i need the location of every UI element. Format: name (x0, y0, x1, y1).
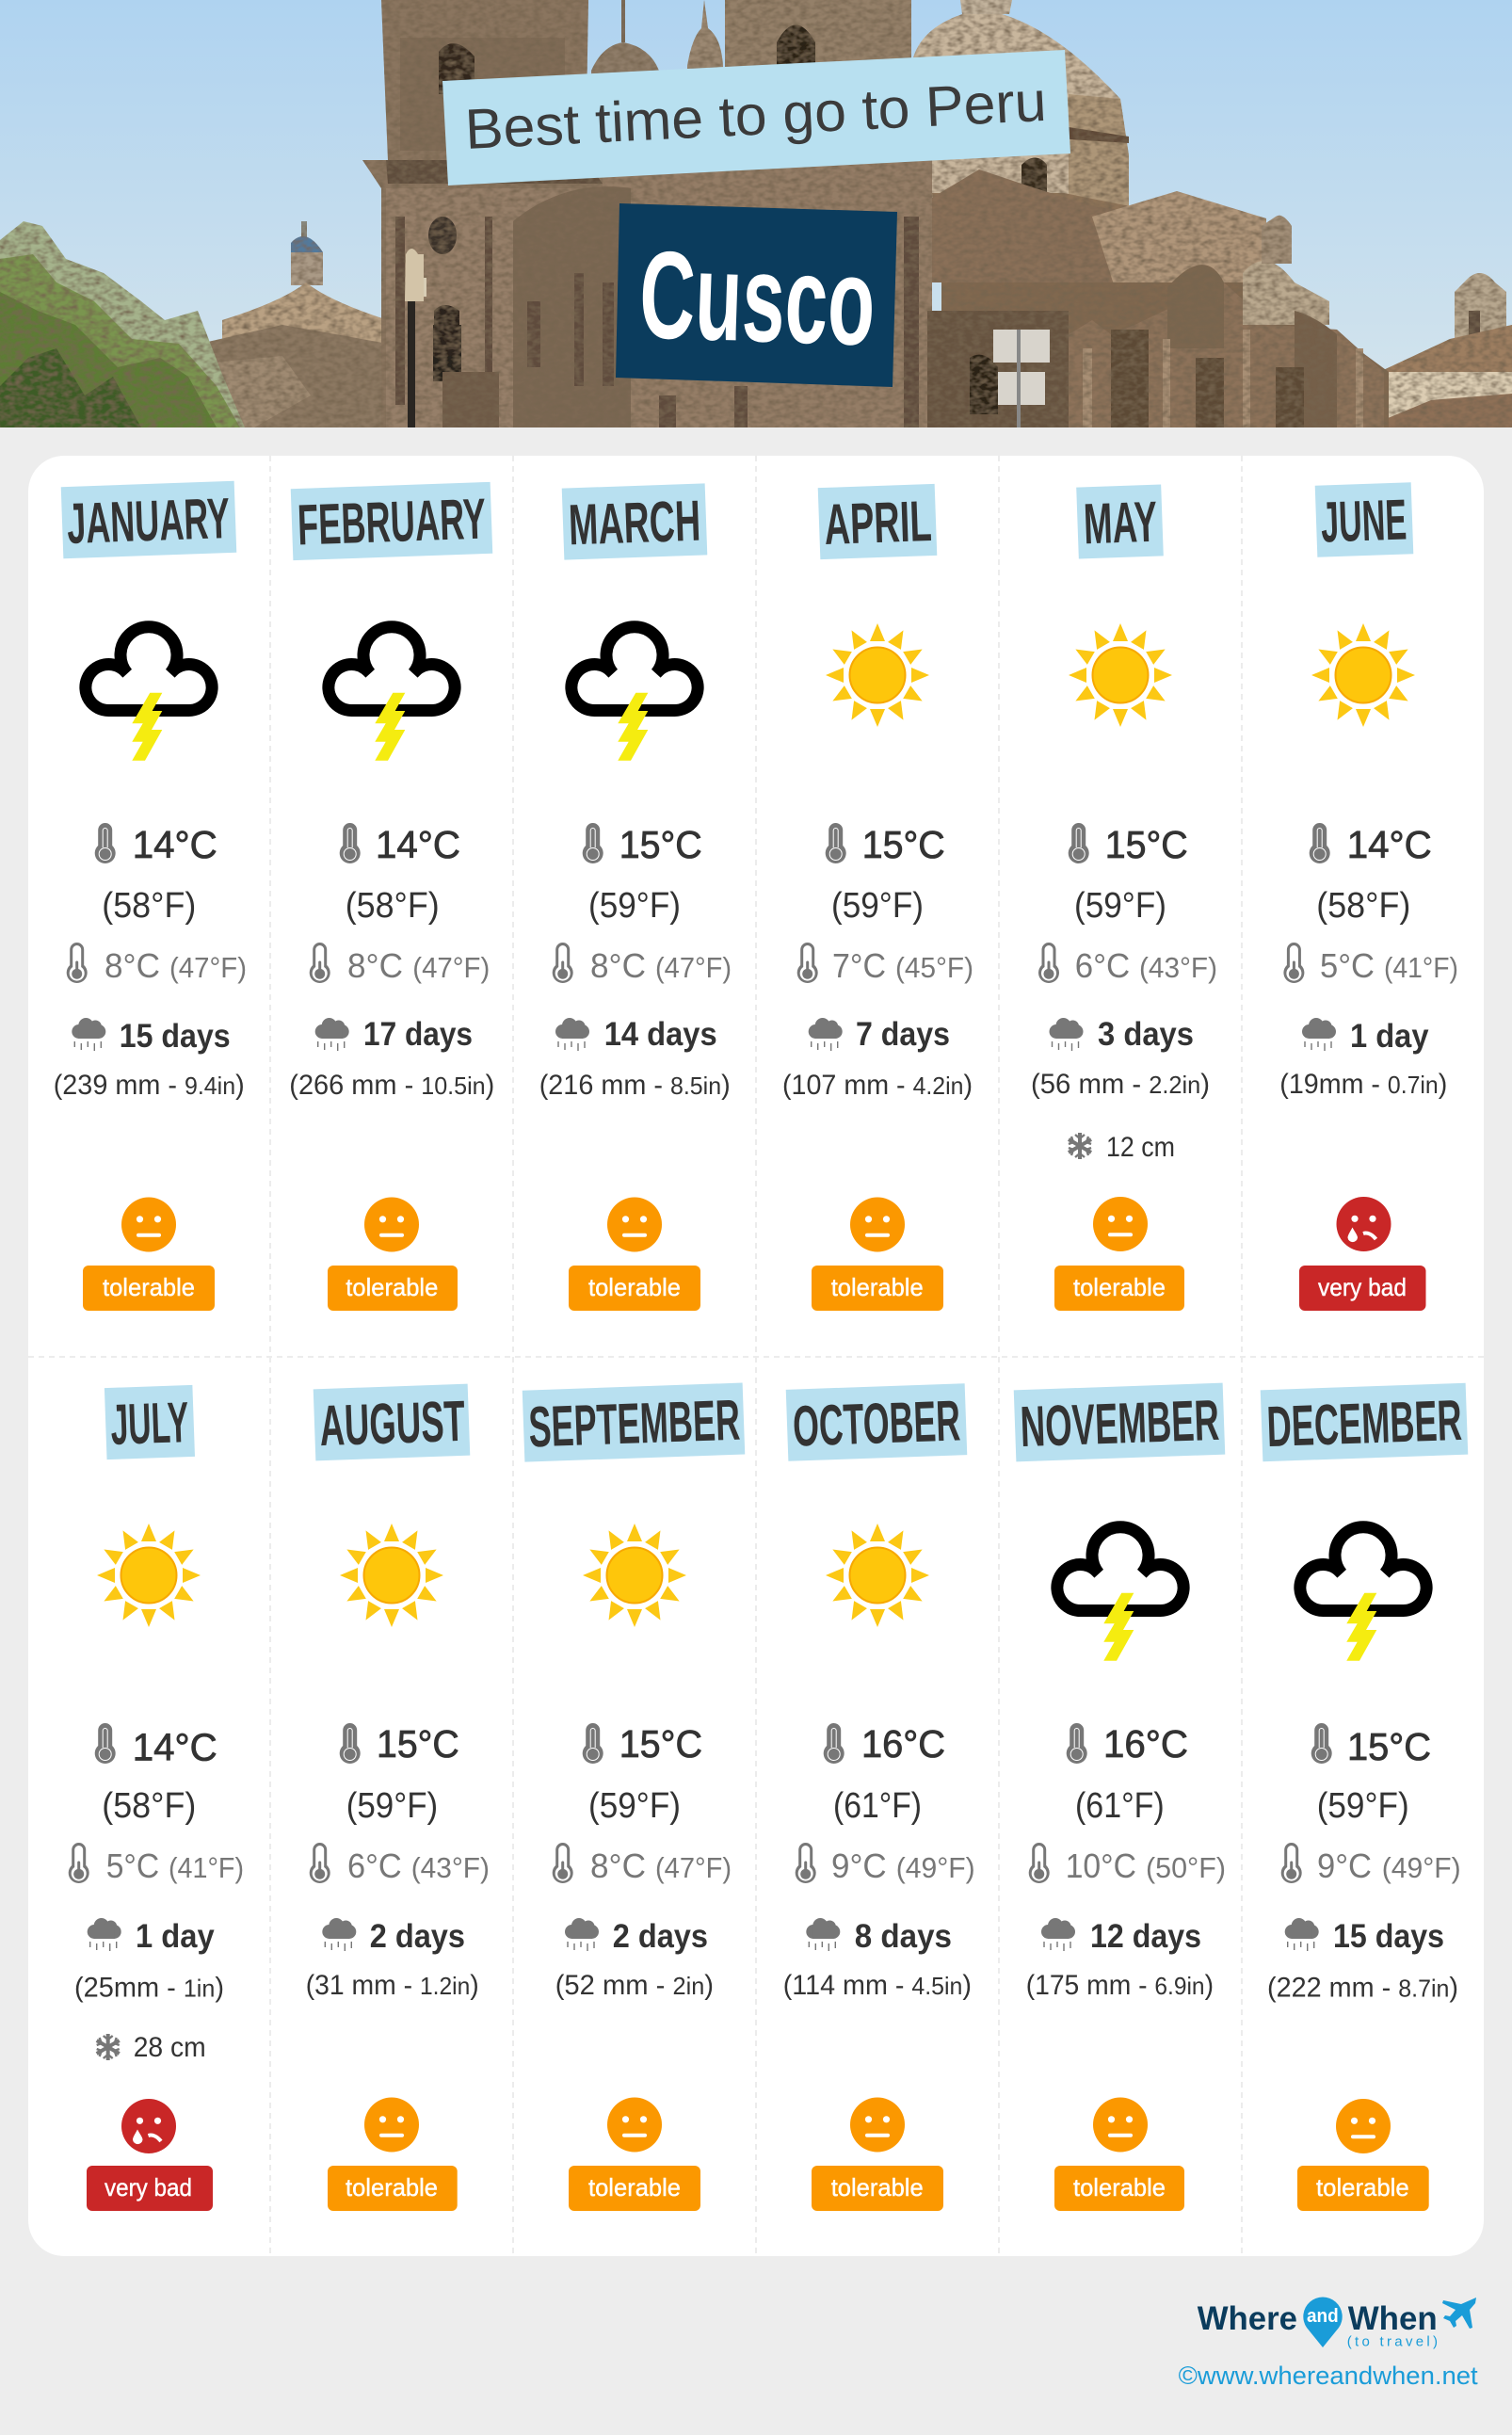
logo: Where and When (to travel): When (1348, 2300, 1438, 2337)
panel: February (289, 482, 494, 1311)
rainy days: 15 days (120, 1018, 231, 1055)
icon: max thermometer (1311, 1723, 1332, 1764)
icon: min thermometer (797, 943, 818, 983)
rainy days: 8 days (855, 1918, 952, 1955)
rainfall amount: (19mm - 0.7in) (1279, 1069, 1447, 1100)
month heading: September (523, 1383, 745, 1462)
panel: September (523, 1383, 745, 2211)
rating: tolerable: tolerable (1073, 2173, 1166, 2201)
icon: max thermometer (95, 823, 116, 863)
min temperature (106, 1846, 244, 1885)
max temperature celsius: 14°C (133, 823, 217, 866)
month heading: June (1315, 482, 1413, 557)
min temperature: 10°C (1066, 1846, 1136, 1885)
min temperature: 8°C (105, 946, 160, 985)
month heading: January: JANUARY (66, 486, 231, 556)
min temperature: 6°C (1075, 946, 1130, 985)
max temperature fahrenheit: (59°F) (1317, 1786, 1409, 1826)
header photo: Cusco cathedral (0, 0, 1512, 427)
min temperature: (47°F) (412, 951, 490, 984)
icon: neutral face (850, 1198, 905, 1252)
min temperature: 9°C (1317, 1846, 1372, 1885)
month heading: October: OCTOBER (792, 1388, 961, 1459)
rainfall amount: (31 mm - 1.2in) (306, 1970, 479, 2001)
rating: tolerable: tolerable (346, 1273, 438, 1301)
rainfall amount: (266 mm - 10.5in) (289, 1070, 494, 1101)
icon: min thermometer (1038, 943, 1059, 983)
logo: Where and When (to travel): (to travel) (1347, 2334, 1438, 2350)
min temperature: 8°C (590, 1846, 646, 1885)
city title banner (616, 203, 897, 387)
icon: min thermometer (310, 943, 330, 983)
icon: rain (315, 1018, 349, 1051)
panel: December (1261, 1383, 1468, 2211)
icon: max thermometer (583, 1723, 603, 1764)
icon: storm (1300, 1527, 1426, 1661)
max temperature celsius: 15°C (619, 823, 702, 866)
min temperature: (47°F) (655, 951, 732, 984)
icon: storm (329, 627, 455, 761)
icon: sun (826, 1524, 929, 1627)
icon: min thermometer (67, 943, 88, 983)
month heading: May: MAY (1083, 490, 1158, 556)
rating: very bad (87, 2166, 213, 2211)
icon: neutral face (1336, 2099, 1391, 2153)
month heading: September: SEPTEMBER (527, 1388, 741, 1459)
max temperature celsius: 16°C (1103, 1722, 1188, 1766)
month heading: July: JULY (109, 1390, 190, 1457)
min temperature (1075, 946, 1217, 985)
icon: max thermometer (1310, 823, 1330, 863)
min temperature: 5°C (1320, 946, 1375, 985)
rainfall amount: (114 mm - 4.5in) (783, 1970, 972, 2001)
rainy days: 2 days (613, 1918, 708, 1955)
min temperature (1317, 1846, 1461, 1885)
min temperature: (45°F) (895, 951, 973, 984)
icon: neutral face (364, 2098, 419, 2153)
panel: November (1014, 1383, 1226, 2211)
rating: tolerable (812, 1266, 943, 1311)
panel: May (1031, 484, 1217, 1311)
min temperature (1066, 1846, 1226, 1885)
month heading: January (61, 481, 236, 558)
max temperature celsius: 15°C (619, 1722, 702, 1766)
max temperature fahrenheit: (58°F) (102, 886, 196, 926)
logo: Where and When (to travel) (1198, 2297, 1476, 2350)
panel: June (1279, 482, 1458, 1311)
icon: neutral face (607, 2098, 662, 2153)
rainfall amount: (239 mm - 9.4in) (54, 1070, 245, 1101)
min temperature: 8°C (347, 946, 403, 985)
month heading: April (818, 484, 937, 559)
icon: storm (1057, 1527, 1183, 1661)
rating: tolerable (1297, 2166, 1429, 2211)
logo: Where and When (to travel): Where (1198, 2300, 1297, 2337)
icon: rain (1285, 1918, 1319, 1951)
min temperature: (50°F) (1146, 1851, 1226, 1884)
rainfall amount: (56 mm - 2.2in) (1031, 1069, 1210, 1100)
month heading: February: FEBRUARY (297, 487, 487, 556)
panel: August (306, 1384, 490, 2211)
month heading: April: APRIL (823, 489, 933, 556)
icon: min thermometer (69, 1843, 89, 1883)
month heading: February (291, 482, 492, 560)
rating: tolerable (83, 1266, 215, 1311)
max temperature celsius: 15°C (1347, 1725, 1431, 1768)
month heading: October (786, 1383, 967, 1461)
icon: rain (806, 1918, 840, 1951)
min temperature (347, 946, 490, 985)
icon: rain (565, 1918, 599, 1951)
icon: neutral face (850, 2098, 905, 2153)
rainy days: 1 day (136, 1918, 215, 1955)
min temperature: (49°F) (896, 1851, 975, 1884)
min temperature (590, 1846, 732, 1885)
max temperature fahrenheit: (59°F) (588, 1786, 681, 1826)
icon: neutral face (607, 1198, 662, 1252)
rating: tolerable (328, 1266, 458, 1311)
min temperature (590, 946, 732, 985)
month heading: November (1014, 1383, 1225, 1461)
rating: tolerable (569, 2166, 700, 2211)
rating: tolerable (1054, 2166, 1184, 2211)
icon: rain (809, 1018, 843, 1051)
max temperature fahrenheit: (58°F) (346, 886, 440, 926)
icon: snowflake (97, 2034, 120, 2060)
subtitle banner: Best time to go to Peru (463, 70, 1048, 161)
min temperature: 7°C (832, 946, 886, 985)
icon: map pin (1303, 2297, 1343, 2347)
icon: max thermometer (583, 823, 603, 863)
min temperature: 8°C (590, 946, 646, 985)
rating: tolerable: tolerable (1316, 2173, 1409, 2201)
calendar card (28, 456, 1484, 2256)
rating: very bad: very bad (1318, 1273, 1407, 1301)
rating: very bad: very bad (105, 2173, 192, 2201)
logo: Where and When (to travel): and (1307, 2306, 1339, 2327)
rainy days: 1 day (1350, 1018, 1429, 1055)
icon: crying face (121, 2099, 176, 2153)
rainy days: 2 days (370, 1918, 465, 1955)
icon: airplane (1442, 2298, 1476, 2329)
icon: min thermometer (553, 943, 573, 983)
rating: tolerable: tolerable (588, 2173, 681, 2201)
max temperature fahrenheit: (59°F) (588, 886, 681, 926)
min temperature: 5°C (106, 1846, 159, 1885)
icon: max thermometer (826, 823, 846, 863)
month heading: March: MARCH (568, 489, 701, 556)
min temperature: (47°F) (169, 951, 247, 984)
icon: storm (571, 627, 698, 761)
rating: tolerable: tolerable (103, 1273, 195, 1301)
rainfall amount: (216 mm - 8.5in) (539, 1070, 731, 1101)
min temperature: (49°F) (1382, 1851, 1461, 1884)
icon: rain (72, 1018, 105, 1051)
icon: max thermometer (340, 1723, 361, 1764)
icon: max thermometer (1067, 1723, 1087, 1764)
max temperature fahrenheit: (59°F) (346, 1786, 438, 1826)
min temperature (347, 1846, 490, 1885)
icon: min thermometer (310, 1843, 330, 1883)
min temperature (832, 946, 973, 985)
snowfall amount: 12 cm (1106, 1132, 1175, 1163)
city title banner: Cusco (637, 225, 877, 371)
icon: rain (1302, 1018, 1336, 1051)
icon: rain (88, 1918, 121, 1951)
min temperature: 9°C (831, 1846, 887, 1885)
rainy days: 14 days (604, 1016, 717, 1053)
subtitle banner (442, 50, 1070, 185)
month heading: August: AUGUST (318, 1389, 466, 1458)
icon: neutral face (121, 1198, 176, 1252)
icon: rain (555, 1018, 589, 1051)
rating: tolerable (812, 2166, 943, 2211)
icon: max thermometer (340, 823, 361, 863)
rating: tolerable (569, 1266, 700, 1311)
icon: sun (583, 1524, 686, 1627)
icon: rain (1041, 1918, 1075, 1951)
rainy days: 15 days (1333, 1918, 1444, 1955)
max temperature fahrenheit: (61°F) (833, 1786, 922, 1826)
rainfall amount: (175 mm - 6.9in) (1026, 1970, 1214, 2001)
panel: April (782, 484, 973, 1311)
max temperature celsius: 15°C (377, 1722, 459, 1766)
max temperature celsius: 14°C (1347, 823, 1432, 866)
month heading: March (562, 483, 707, 560)
icon: min thermometer (553, 1843, 573, 1883)
copyright url: ©www.whereandwhen.net (1179, 2362, 1478, 2390)
icon: rain (1049, 1018, 1083, 1051)
icon: sun (97, 1524, 201, 1627)
icon: neutral face (1093, 1197, 1148, 1251)
min temperature: (47°F) (655, 1851, 732, 1884)
icon: max thermometer (1069, 823, 1089, 863)
panel: January (54, 481, 247, 1311)
max temperature celsius: 15°C (862, 823, 945, 866)
max temperature celsius: 14°C (133, 1725, 217, 1768)
min temperature (831, 1846, 975, 1885)
panel: October (783, 1383, 975, 2211)
month heading: November: NOVEMBER (1020, 1388, 1220, 1459)
max temperature fahrenheit: (59°F) (831, 886, 924, 926)
max temperature fahrenheit: (61°F) (1075, 1786, 1165, 1826)
min temperature: 6°C (347, 1846, 402, 1885)
rainy days: 3 days (1098, 1016, 1194, 1053)
max temperature celsius: 16°C (861, 1722, 945, 1766)
icon: neutral face (1093, 2098, 1148, 2153)
min temperature: (41°F) (1384, 951, 1458, 984)
icon: crying face (1337, 1197, 1391, 1251)
min temperature (105, 946, 247, 985)
icon: min thermometer (1281, 1843, 1302, 1883)
icon: sun (340, 1524, 443, 1627)
rating: tolerable: tolerable (346, 2173, 438, 2201)
rating: tolerable: tolerable (831, 2173, 924, 2201)
snowfall amount: 28 cm (134, 2032, 206, 2063)
icon: max thermometer (95, 1723, 116, 1764)
panel: July (69, 1385, 244, 2211)
icon: snowflake (1069, 1133, 1091, 1159)
icon: sun (1069, 623, 1172, 727)
panel: March (539, 483, 732, 1311)
icon: max thermometer (824, 1723, 844, 1764)
rainy days: 17 days (363, 1016, 473, 1053)
month heading: August (314, 1384, 470, 1460)
rating: tolerable: tolerable (1073, 1273, 1166, 1301)
icon: min thermometer (796, 1843, 816, 1883)
min temperature: (41°F) (169, 1851, 244, 1884)
month heading: May (1076, 484, 1164, 559)
icon: rain (322, 1918, 356, 1951)
rainfall amount: (25mm - 1in) (74, 1973, 224, 2004)
icon: sun (826, 623, 929, 727)
icon: storm (86, 627, 212, 761)
max temperature fahrenheit: (58°F) (102, 1786, 196, 1826)
min temperature: (43°F) (411, 1851, 490, 1884)
rating: very bad (1299, 1266, 1425, 1311)
max temperature fahrenheit: (59°F) (1074, 886, 1166, 926)
max temperature fahrenheit: (58°F) (1316, 886, 1410, 926)
icon: min thermometer (1029, 1843, 1050, 1883)
rainy days: 12 days (1090, 1918, 1201, 1955)
icon: min thermometer (1283, 943, 1304, 983)
rainy days: 7 days (856, 1016, 950, 1053)
icon: sun (1311, 623, 1415, 727)
rainfall amount: (222 mm - 8.7in) (1267, 1973, 1458, 2004)
month heading: July (105, 1385, 195, 1459)
max temperature celsius: 15°C (1105, 823, 1188, 866)
rating: tolerable: tolerable (588, 1273, 681, 1301)
month heading: June: JUNE (1320, 487, 1407, 555)
rating: tolerable (328, 2166, 458, 2211)
icon: neutral face (364, 1198, 419, 1252)
rainfall amount: (107 mm - 4.2in) (782, 1070, 973, 1101)
min temperature: (43°F) (1139, 951, 1217, 984)
rating: tolerable (1054, 1266, 1184, 1311)
rating: tolerable: tolerable (831, 1273, 924, 1301)
max temperature celsius: 14°C (376, 823, 460, 866)
min temperature (1320, 946, 1458, 985)
rainfall amount: (52 mm - 2in) (555, 1970, 714, 2001)
